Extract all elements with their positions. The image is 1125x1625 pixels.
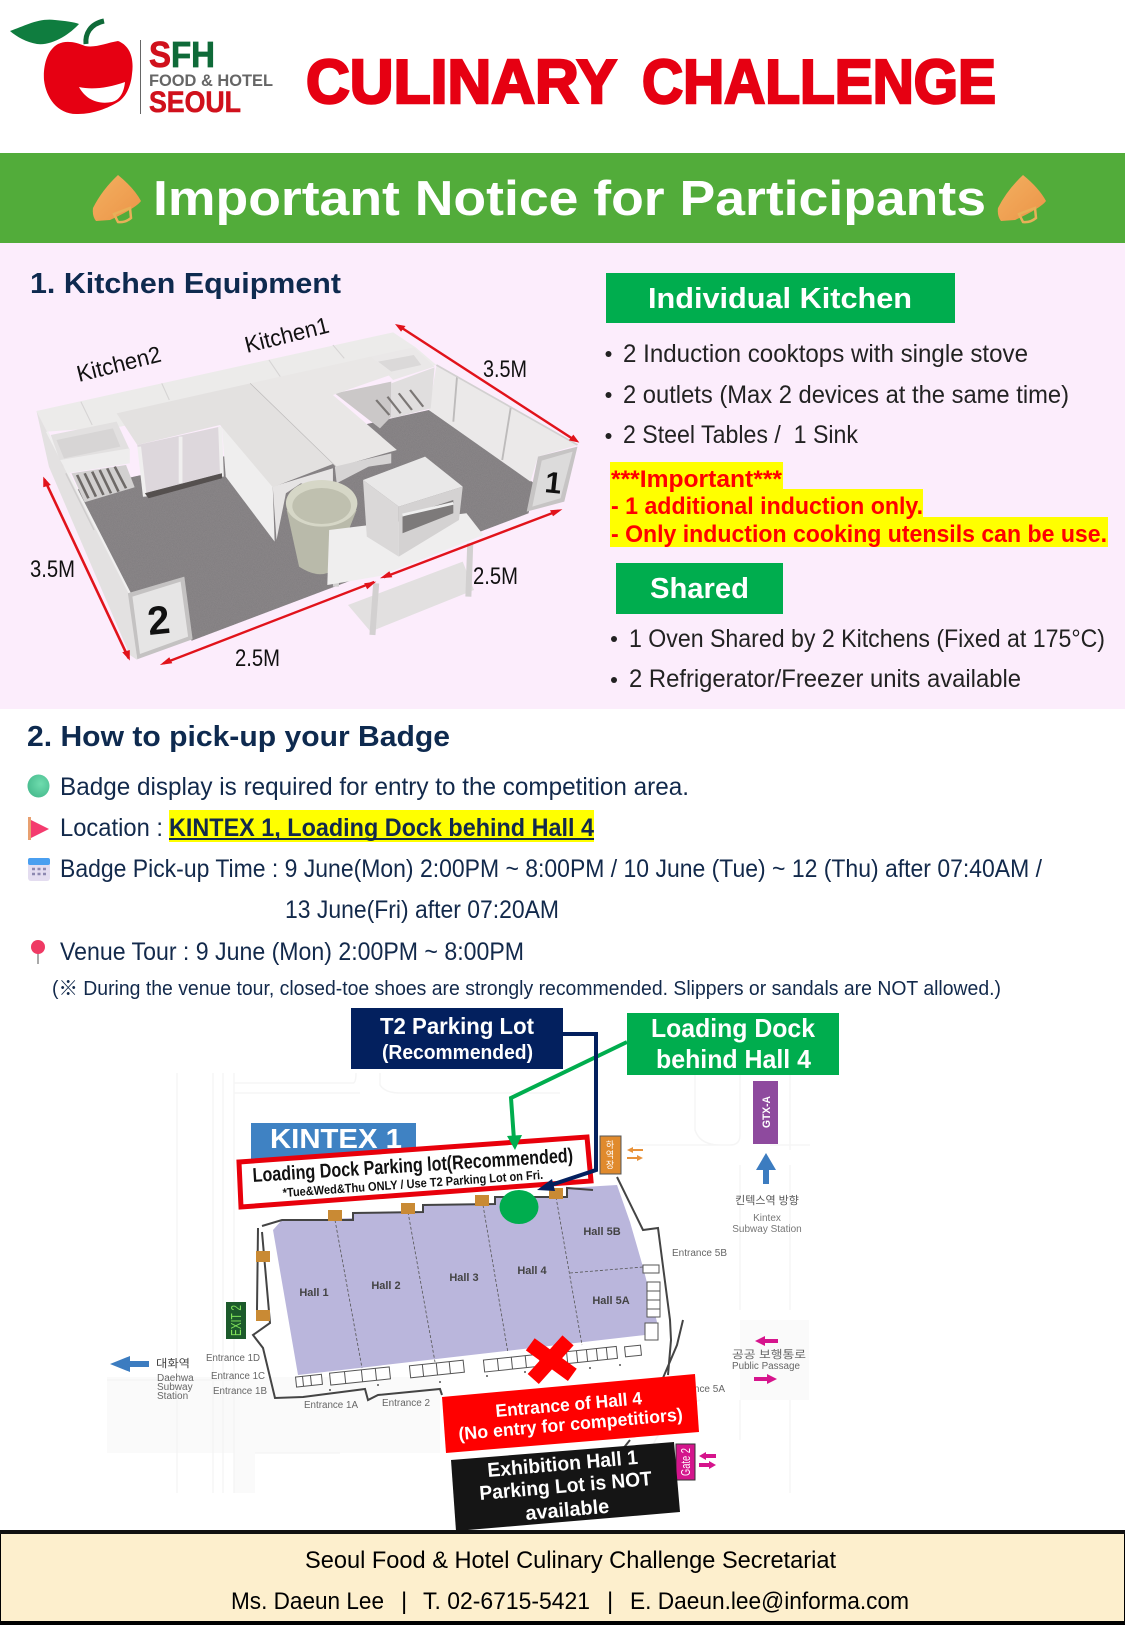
- direction: Kintex station: Kintex: [753, 1213, 781, 1224]
- marker: loading dock: [500, 1190, 538, 1224]
- label: Entrance 5B: Entrance 5B: [672, 1248, 727, 1259]
- labels: west entrances: Entrance 1D: [206, 1353, 260, 1364]
- labels: halls: Hall 5A: [592, 1295, 630, 1307]
- direction: public passage: [732, 1336, 806, 1384]
- text: shoes note: (※ During the venue tour, closed-toe shoes are strongly recommended. Slippers or sandals are NOT allowed.): [52, 978, 1001, 1000]
- text: badge display: Badge display is required for entry to the competition area.: [60, 773, 689, 801]
- callout: important: - 1 additional induction only.: [611, 493, 923, 520]
- heading: kitchen equipment: 1. Kitchen Equipment: [30, 268, 341, 300]
- direction: Kintex station: Subway Station: [732, 1224, 802, 1235]
- callout: T2 parking lot: [351, 1008, 563, 1069]
- callout: loading dock parking: [239, 1137, 591, 1207]
- oven stand: [348, 562, 474, 632]
- icon: red X: [526, 1335, 577, 1384]
- text: pick-up time: Badge Pick-up Time : 9 June(Mon) 2:00PM ~ 8:00PM / 10 June (Tue) ~ 12 (Thu) after 07:40AM /: [60, 855, 1042, 883]
- oven: [363, 457, 463, 507]
- arrows: orange dock: [627, 1147, 643, 1161]
- labels: west entrances: [206, 1353, 430, 1411]
- panel: footer secretariat: [0, 1530, 1125, 1625]
- panel 2: [128, 577, 193, 659]
- sign: orange dock: 하: [606, 1140, 615, 1150]
- centre block: [222, 427, 275, 542]
- icon: flag: [28, 817, 49, 840]
- sign: Gate 2: [676, 1444, 695, 1480]
- list: individual kitchen items: [606, 340, 1069, 449]
- list: shared items: 2 Refrigerator/Freezer units available: [629, 665, 1021, 693]
- callout: entrance of hall 4: (No entry for competitiors): [458, 1404, 683, 1444]
- left rack and sink: [71, 465, 135, 502]
- heading: important notice: Important Notice for Participants: [153, 172, 986, 226]
- map: KINTEX 1 venue: [107, 1008, 839, 1531]
- logo: SFH Food & Hotel Seoul: SFH: [149, 34, 215, 75]
- heading: individual kitchen: [606, 273, 955, 323]
- text: venue tour: Venue Tour : 9 June (Mon) 2:00PM ~ 8:00PM: [60, 938, 524, 966]
- labels: west entrances: Entrance 1C: [211, 1371, 265, 1382]
- panel: kitchen equipment: [0, 243, 1125, 709]
- callout: loading dock behind hall 4: [627, 1013, 839, 1075]
- direction: Kintex station: 킨텍스역 방향: [735, 1194, 799, 1207]
- heading: shared: [616, 563, 783, 614]
- callout: entrance of hall 4: [442, 1374, 699, 1453]
- callout: loading dock behind hall 4: behind Hall 4: [656, 1044, 812, 1074]
- direction: Kintex station: [732, 1153, 802, 1235]
- text: contact: |: [607, 1588, 613, 1615]
- arrow: T2 parking: [537, 1034, 596, 1191]
- sign: orange dock: [600, 1136, 621, 1174]
- callout: important: [610, 462, 1108, 548]
- carpet: [75, 410, 534, 641]
- callout: hall 1 parking: [451, 1442, 680, 1531]
- icon: pin: [31, 940, 45, 964]
- label: booth 1: 1: [543, 466, 563, 501]
- panel 1: [527, 447, 577, 512]
- label: Entrance 5A: Entrance 5A: [670, 1384, 725, 1395]
- direction: Daehwa station: 대화역: [156, 1357, 190, 1370]
- direction: Daehwa station: Station: [157, 1391, 188, 1402]
- title: Culinary Challenge: CHALLENGE: [642, 48, 996, 117]
- sign: orange dock: 역: [606, 1150, 614, 1160]
- text: secretariat: Seoul Food & Hotel Culinary Challenge Secretariat: [305, 1547, 836, 1574]
- left wall: [36, 411, 137, 660]
- arrow: loading dock: [507, 1042, 627, 1150]
- panel: badge pick-up: [27, 721, 1042, 1000]
- callout: hall 1 parking: Exhibition Hall 1: [487, 1447, 639, 1482]
- callout: important: ***Important***: [611, 466, 783, 493]
- callout: hall 1 parking: available: [525, 1496, 610, 1525]
- illustration: kitchen booth: [30, 312, 579, 672]
- icon: megaphone left: [93, 175, 141, 222]
- sign: EXIT 2: [226, 1302, 246, 1339]
- callout: loading dock parking: *Tue&Wed&Thu ONLY / Use T2 Parking Lot on Fri.: [282, 1168, 544, 1200]
- icon: calendar: [28, 858, 50, 881]
- label: depth right: 2.5M: [473, 563, 518, 590]
- labels: halls: Hall 1: [299, 1287, 329, 1299]
- title: Culinary Challenge: CULINARY: [306, 48, 617, 117]
- heading: shared: Shared: [650, 573, 749, 605]
- label: Kitchen1: Kitchen1: [242, 312, 332, 358]
- list: individual kitchen items: 2 Steel Tables / 1 Sink: [623, 421, 858, 449]
- sign: GTX-A: GTX-A: [761, 1096, 773, 1128]
- table tops: [117, 383, 335, 487]
- list: individual kitchen items: 2 Induction cooktops with single stove: [623, 340, 1028, 368]
- labels: west entrances: Entrance 2: [382, 1398, 430, 1409]
- icon: megaphone right: [998, 175, 1046, 222]
- text: contact: T. 02-6715-5421: [423, 1588, 590, 1615]
- text: pick-up time: [60, 855, 1042, 924]
- building: exhibition halls: [253, 1177, 683, 1450]
- logo: SFH Food & Hotel Seoul: [10, 20, 273, 119]
- labels: halls: Hall 5B: [583, 1226, 621, 1238]
- direction: public passage: 공공 보행통로: [732, 1348, 806, 1361]
- label: width left: 3.5M: [30, 556, 75, 583]
- icon: green ball: [28, 774, 50, 798]
- labels: halls: Hall 2: [371, 1280, 401, 1292]
- text: pick-up time: 13 June(Fri) after 07:20AM: [285, 896, 559, 924]
- text: location highlight: KINTEX 1, Loading Dock behind Hall 4: [169, 814, 594, 842]
- heading: badge: 2. How to pick-up your Badge: [27, 721, 450, 753]
- text: contact: [231, 1588, 909, 1615]
- text: contact: |: [401, 1588, 407, 1615]
- icon: apple: [10, 20, 133, 114]
- direction: Daehwa station: [110, 1356, 194, 1402]
- logo: SFH Food & Hotel Seoul: FOOD & HOTEL: [149, 71, 273, 90]
- labels: halls: [299, 1226, 630, 1307]
- right wall: [429, 366, 577, 482]
- label: width right: 3.5M: [483, 356, 527, 383]
- label: Kitchen2: Kitchen2: [74, 341, 164, 387]
- labels: halls: Hall 4: [517, 1265, 548, 1277]
- sign: Gate 2: Gate 2: [678, 1448, 693, 1476]
- icons: loading docks: [256, 1188, 563, 1321]
- table 2 base: [137, 427, 222, 493]
- callout: hall 1 parking: Parking Lot is NOT: [479, 1468, 653, 1505]
- direction: Daehwa station: Subway: [157, 1382, 193, 1393]
- callout: important: - Only induction cooking utensils can be use.: [611, 521, 1107, 548]
- text: contact: Ms. Daeun Lee: [231, 1588, 384, 1615]
- title: Culinary Challenge: [306, 48, 996, 117]
- label: KINTEX 1: [251, 1123, 416, 1159]
- text: contact: E. Daeun.lee@informa.com: [630, 1588, 909, 1615]
- callout: T2 parking lot: (Recommended): [382, 1042, 533, 1064]
- back wall top: [36, 332, 436, 432]
- labels: halls: Hall 3: [449, 1272, 479, 1284]
- callout: loading dock behind hall 4: Loading Dock: [651, 1013, 816, 1043]
- list: shared items: [611, 625, 1105, 693]
- arrows: dimensions: [43, 324, 579, 665]
- sign: EXIT 2: EXIT 2: [228, 1305, 245, 1336]
- heading: individual kitchen: Individual Kitchen: [648, 283, 912, 315]
- text: location: Location :: [60, 814, 163, 842]
- direction: public passage: Public Passage: [732, 1361, 800, 1372]
- label: booth 2: 2: [145, 598, 172, 644]
- panel: notice banner: [0, 153, 1125, 243]
- arrows: Gate 2: [699, 1452, 716, 1469]
- list: individual kitchen items: 2 outlets (Max 2 devices at the same time): [623, 381, 1069, 409]
- labels: west entrances: Entrance 1B: [213, 1386, 267, 1397]
- logo: SFH Food & Hotel Seoul: SEOUL: [149, 86, 241, 119]
- callout: T2 parking lot: T2 Parking Lot: [380, 1013, 534, 1039]
- label: depth bottom: 2.5M: [235, 645, 280, 672]
- sign: GTX-A: [753, 1081, 778, 1144]
- callout: loading dock parking: Loading Dock Parking lot(Recommended): [252, 1145, 574, 1187]
- right rack: [335, 382, 391, 428]
- direction: Daehwa station: Daehwa: [157, 1373, 194, 1384]
- bin: [287, 510, 357, 574]
- callout: entrance of hall 4: Entrance of Hall 4: [495, 1388, 643, 1421]
- labels: west entrances: Entrance 1A: [304, 1400, 358, 1411]
- label: KINTEX 1: KINTEX 1: [270, 1123, 402, 1154]
- sign: orange dock: 장: [606, 1160, 614, 1170]
